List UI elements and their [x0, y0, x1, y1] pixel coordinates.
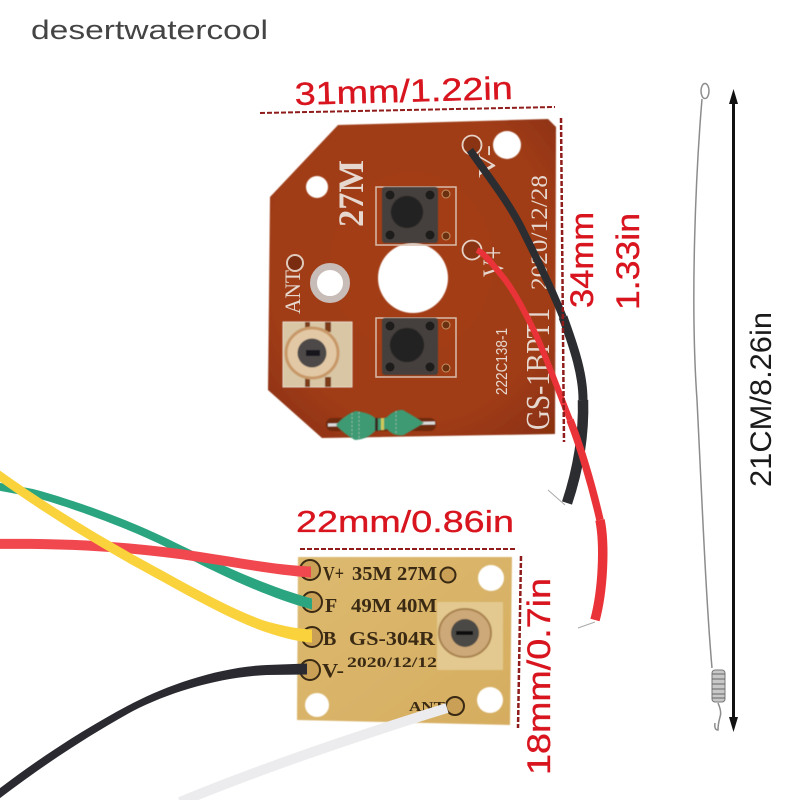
push button top — [376, 187, 456, 245]
dimension text 34mm: 34mm — [564, 212, 600, 308]
printed labels: ANT — [409, 700, 446, 715]
length label: 21CM/8.26in — [745, 312, 778, 487]
dimension text 18mm: 18mm/0.7in — [521, 578, 557, 775]
inductor — [326, 410, 436, 440]
dimension line: top width — [260, 107, 555, 113]
printed labels: GS-304R — [349, 628, 436, 650]
solder pads — [462, 136, 482, 260]
printed labels — [322, 563, 446, 715]
dimension text 31mm: 31mm/1.22in — [294, 70, 513, 112]
mounting holes — [305, 565, 504, 717]
tuning coil — [283, 322, 352, 387]
dimension text 22mm: 22mm/0.86in — [296, 504, 514, 539]
board label V-: V- — [475, 145, 501, 178]
board label serial: 222C138-1 — [494, 328, 511, 395]
panel: red transmitter board — [268, 119, 557, 440]
printed labels: 2020/12/12 — [347, 655, 437, 671]
red wire, red board — [477, 250, 603, 628]
white wire, gold board — [180, 708, 447, 800]
dimension line: right height — [561, 118, 564, 442]
silver ring hole — [314, 266, 346, 300]
tuning coil — [437, 602, 503, 670]
board label model: GS-1BPT1 — [520, 308, 557, 430]
solder pads — [300, 560, 464, 715]
dimension line: lower width — [300, 548, 516, 550]
printed labels: V+ — [323, 563, 344, 585]
yellow wire, gold board — [0, 467, 312, 642]
printed labels: F — [325, 595, 337, 617]
printed labels: 35M 27M — [352, 563, 437, 585]
black wire, red board — [470, 150, 583, 505]
board label date: 2020/12/28 — [527, 175, 552, 290]
watermark title: desertwatercool — [31, 15, 268, 45]
green wire, gold board — [0, 482, 312, 610]
length arrow — [729, 89, 738, 732]
board body — [297, 557, 512, 725]
dimension text 1.33in: 1.33in — [610, 213, 646, 310]
push button bottom — [376, 318, 456, 377]
red wire, gold board — [0, 539, 311, 578]
black wire, gold board — [0, 664, 307, 800]
ANT pad — [287, 255, 303, 271]
board label 27M: 27M — [331, 160, 371, 227]
antenna wire with spring — [694, 84, 725, 730]
dimension line: lower height — [518, 556, 521, 728]
printed labels: V- — [322, 660, 344, 682]
printed labels: 49M 40M — [351, 595, 437, 617]
board label ANT: ANT — [280, 269, 305, 314]
printed labels: B — [323, 628, 336, 650]
board body — [268, 119, 556, 438]
mounting holes — [306, 131, 521, 313]
board label V+: V+ — [477, 246, 510, 277]
panel: gold receiver board — [297, 557, 512, 725]
